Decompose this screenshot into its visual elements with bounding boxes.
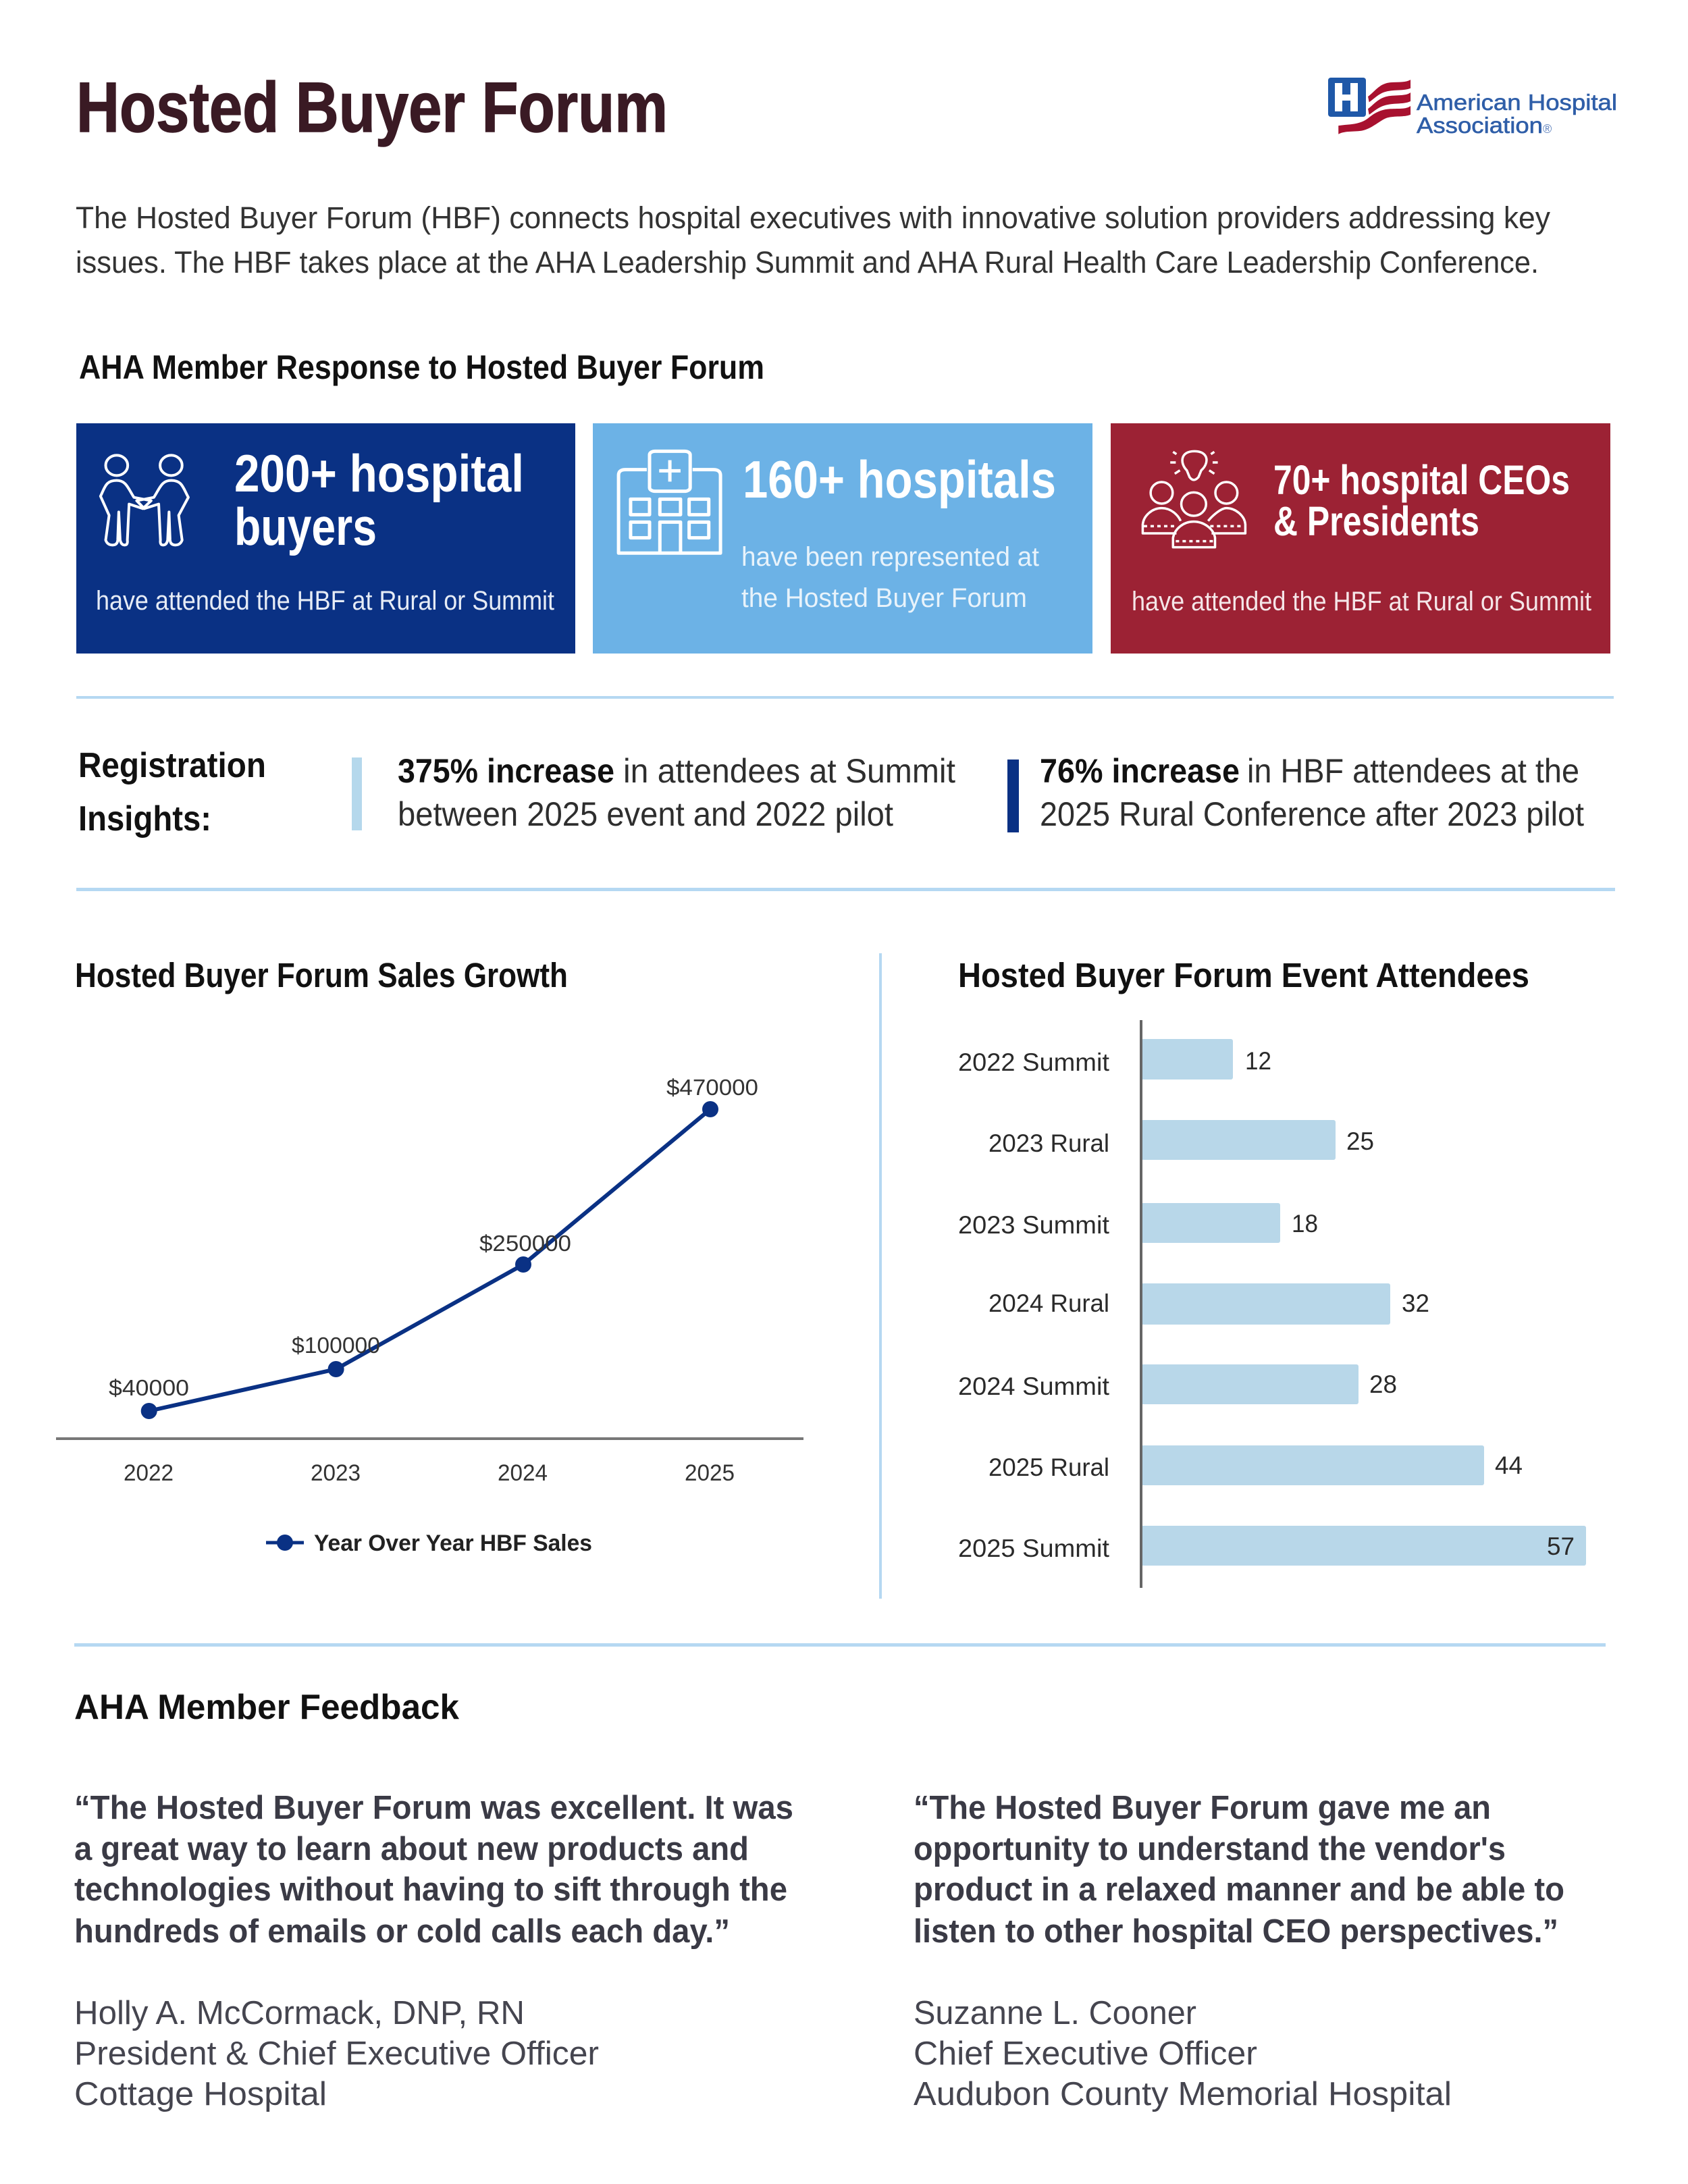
logo: American Hospital Association: ®	[1543, 122, 1552, 136]
heading: member feedback: AHA Member Feedback	[74, 1688, 459, 1727]
insight: 375% increase: in attendees at Summit	[623, 752, 955, 790]
panel: 200+ hospital buyers: buyers	[234, 497, 377, 556]
line chart: $100000	[292, 1333, 380, 1358]
stat caption: have attended the HBF at Rural or Summit	[96, 586, 554, 616]
bar chart: 2024 Summit	[958, 1373, 1110, 1400]
panel: 70+ hospital CEOs: & Presidents	[1273, 498, 1479, 544]
bar chart: 2022 Summit	[958, 1048, 1110, 1076]
intro text	[76, 201, 1550, 279]
attribution: Suzanne L. Cooner	[914, 1995, 1196, 2031]
attribution	[914, 1995, 1452, 2112]
bar chart: 2024 Rural	[988, 1289, 1109, 1317]
stat caption: have attended the HBF at Rural or Summit	[1132, 587, 1591, 616]
bar chart: 2023 Rural	[988, 1129, 1109, 1157]
legend: Year Over Year HBF Sales	[314, 1530, 592, 1556]
line chart: 2022	[124, 1460, 174, 1486]
heading: member response: AHA Member Response to Hosted Buyer Forum	[79, 348, 764, 386]
panel: 200+ hospital buyers	[76, 423, 575, 654]
intro text: issues. The HBF takes place at the AHA Leadership Summit and AHA Rural Health Care Leadership Conference.	[76, 245, 1539, 279]
heading: Insights:	[78, 799, 211, 838]
quote	[914, 1790, 1564, 1950]
quote: a great way to learn about new products and	[74, 1831, 749, 1867]
quote: listen to other hospital CEO perspectives.”	[914, 1913, 1558, 1950]
icon: handshake	[101, 455, 188, 545]
quote	[74, 1790, 793, 1950]
bar chart: 57	[1547, 1533, 1575, 1560]
line chart: $470000	[666, 1075, 758, 1100]
icon: hospital building	[618, 451, 720, 553]
insight: 76% increase: 2025 Rural Conference after 2023 pilot	[1040, 795, 1584, 833]
heading: Registration	[78, 746, 266, 785]
quote: technologies without having to sift through the	[74, 1871, 787, 1908]
stat: 160+ hospitals	[743, 450, 1056, 509]
panel: quote right	[914, 1790, 1564, 2112]
line chart: 2025	[685, 1460, 735, 1486]
quote: “The Hosted Buyer Forum gave me an	[914, 1790, 1491, 1826]
attribution: Chief Executive Officer	[914, 2035, 1257, 2072]
panel: 160+ hospitals	[593, 423, 1092, 654]
quote: product in a relaxed manner and be able to	[914, 1871, 1564, 1908]
bar chart: 25	[1346, 1127, 1374, 1155]
bar chart: 18	[1292, 1210, 1318, 1237]
heading: Hosted Buyer Forum Sales Growth	[75, 956, 568, 994]
panel: event attendees chart	[958, 956, 1586, 1588]
line chart: 2023	[311, 1460, 361, 1486]
quote: “The Hosted Buyer Forum was excellent. It was	[74, 1790, 793, 1826]
bar chart: 2023 Summit	[958, 1211, 1110, 1239]
quote: hundreds of emails or cold calls each day.”	[74, 1913, 730, 1950]
logo: American Hospital Association: Association	[1417, 113, 1543, 138]
stat: 200+ hospital	[234, 444, 524, 503]
attribution: Holly A. McCormack, DNP, RN	[74, 1995, 525, 2031]
stat caption: have been represented at	[741, 542, 1039, 572]
line chart	[56, 1075, 803, 1486]
line chart: $40000	[109, 1375, 189, 1400]
bar chart: 2025 Summit	[958, 1535, 1110, 1562]
attribution: Cottage Hospital	[74, 2076, 327, 2112]
logo: American Hospital Association	[1328, 78, 1617, 138]
attribution: Audubon County Memorial Hospital	[914, 2076, 1452, 2112]
intro text: The Hosted Buyer Forum (HBF) connects hospital executives with innovative solution providers addressing key	[76, 201, 1550, 235]
bar chart: 32	[1402, 1289, 1429, 1317]
panel: quote left	[74, 1790, 793, 2112]
panel: registration insights	[78, 746, 1584, 838]
stat caption: the Hosted Buyer Forum	[741, 583, 1027, 613]
insight: 76% increase	[1007, 752, 1584, 833]
bar chart	[958, 1020, 1586, 1588]
insight: 375% increase	[352, 752, 955, 833]
attribution	[74, 1995, 599, 2112]
insight: 375% increase: 375% increase	[398, 752, 614, 790]
insight: 76% increase: in HBF attendees at the	[1247, 752, 1579, 790]
line chart: 2024	[498, 1460, 548, 1486]
heading	[78, 746, 266, 838]
title: Hosted Buyer Forum	[76, 68, 668, 147]
panel: sales growth chart	[56, 956, 803, 1556]
line chart: $250000	[479, 1231, 571, 1256]
quote: opportunity to understand the vendor's	[914, 1831, 1506, 1867]
logo: American Hospital Association: American Hospital	[1417, 90, 1617, 115]
bar chart: 2025 Rural	[988, 1454, 1109, 1481]
stat caption	[741, 542, 1039, 613]
heading: Hosted Buyer Forum Event Attendees	[958, 956, 1529, 994]
bar chart: 12	[1245, 1047, 1271, 1075]
insight: 76% increase: 76% increase	[1040, 752, 1240, 790]
stat: 70+ hospital CEOs	[1273, 457, 1570, 503]
panel: 70+ hospital CEOs	[1111, 423, 1610, 654]
attribution: President & Chief Executive Officer	[74, 2035, 599, 2072]
icon: group with light bulb	[1142, 451, 1245, 548]
bar chart: 28	[1369, 1370, 1397, 1398]
insight: 375% increase: between 2025 event and 2022 pilot	[398, 795, 893, 833]
bar chart: 44	[1495, 1451, 1523, 1479]
